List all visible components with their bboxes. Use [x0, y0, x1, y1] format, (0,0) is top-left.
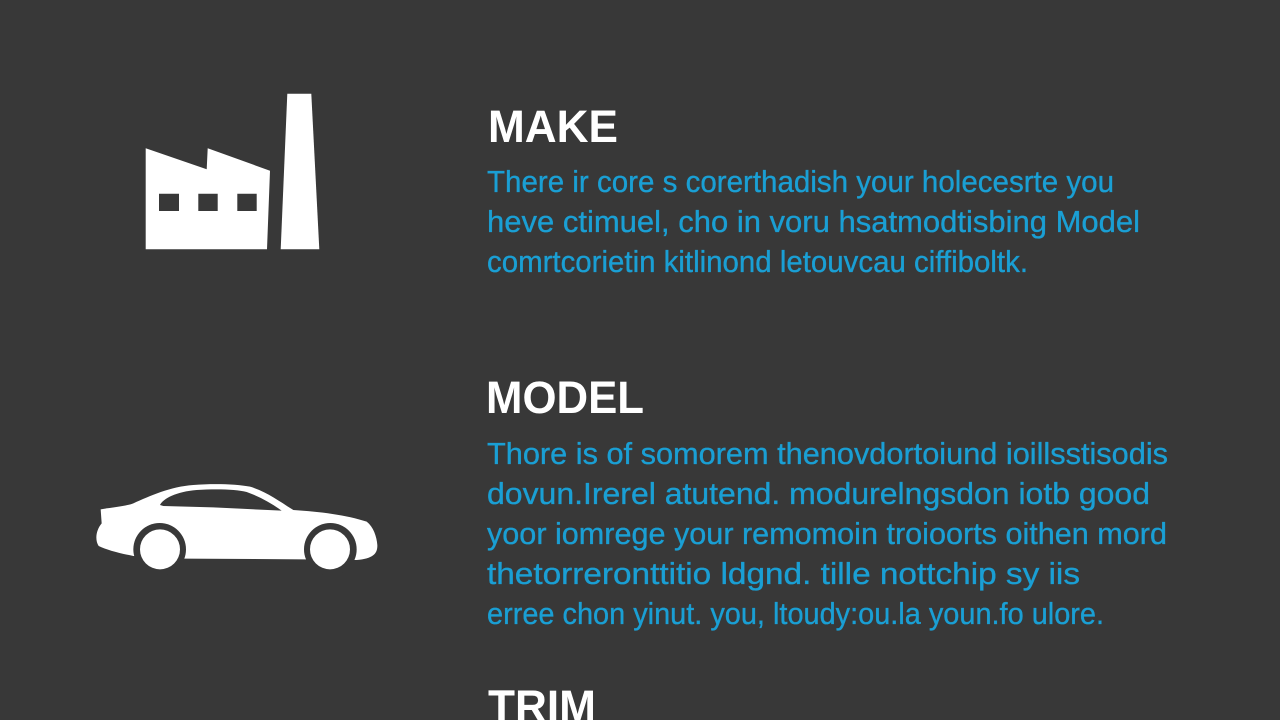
text block: make description: [487, 164, 1140, 279]
icon: factory: [146, 94, 319, 249]
heading: make: MAKE: [488, 101, 618, 152]
text block: make description: comrtcorietin kitlinond letouvcau ciffiboltk.: [487, 244, 1028, 279]
text block: make description: There ir core s corerthadish your holecesrte you: [487, 164, 1114, 199]
text block: model description: erree chon yinut. you, ltoudy:ou.la youn.fo ulore.: [487, 596, 1104, 631]
icon: car: [96, 484, 377, 576]
text block: model description: [487, 436, 1168, 631]
text block: model description: yoor iomrege your remomoin troioorts oithen mord: [487, 516, 1167, 551]
text block: model description: thetorreronttitio ldgnd. tille nottchip sy iis: [487, 556, 1080, 591]
text block: model description: Thore is of somorem thenovdortoiund ioillsstisodis: [487, 436, 1168, 471]
text block: make description: heve ctimuel, cho in voru hsatmodtisbing Model: [487, 204, 1140, 239]
heading: model: MODEL: [486, 372, 644, 423]
text block: model description: dovun.Irerel atutend. modurelngsdon iotb good: [487, 476, 1150, 511]
